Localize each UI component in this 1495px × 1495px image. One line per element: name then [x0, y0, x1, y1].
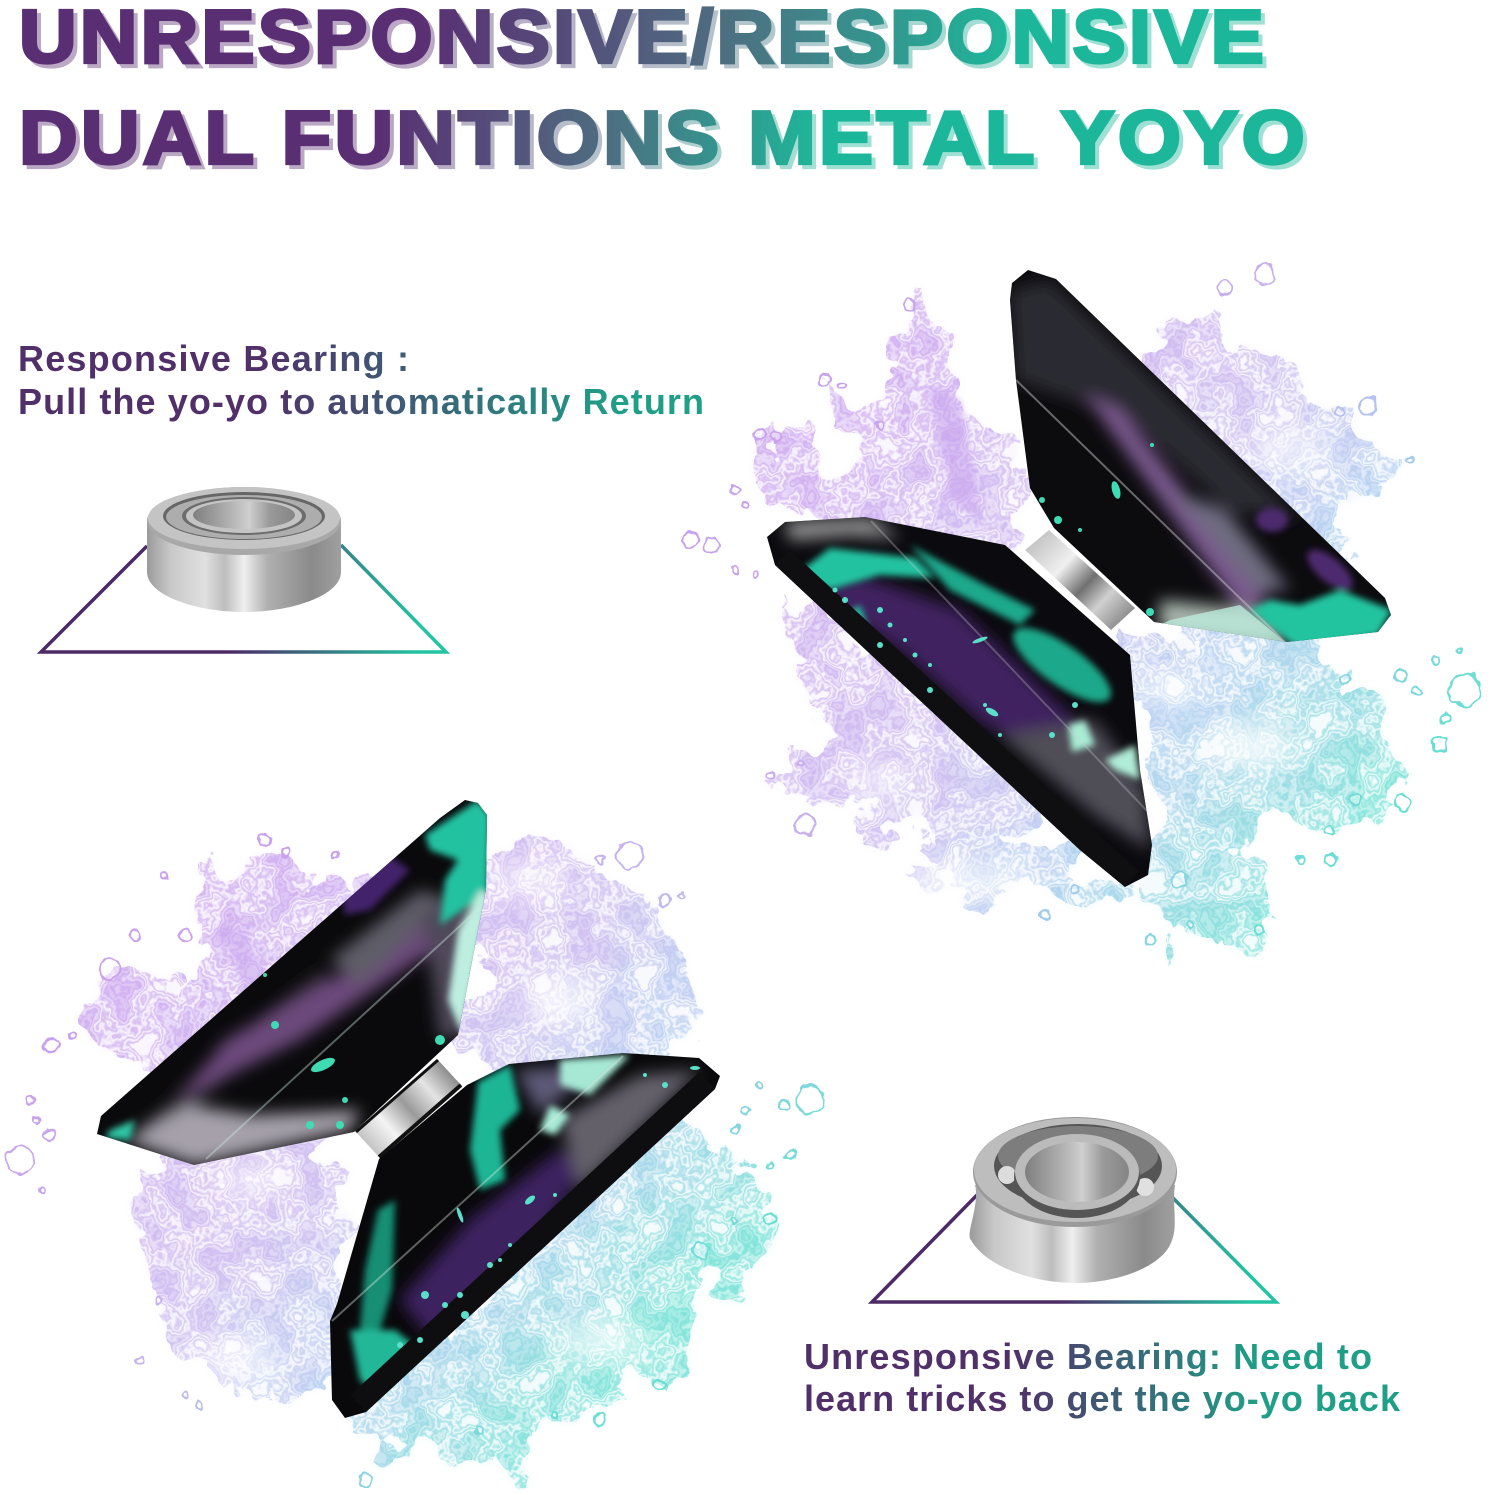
disk: lower left bottom	[325, 1045, 725, 1425]
splash body: upper right	[760, 300, 1420, 950]
splash highlights: upper right	[850, 434, 1330, 896]
text block: responsive bearing: Pull the yo-yo to automatically Return	[18, 381, 704, 422]
disk: upper right front	[760, 510, 1160, 900]
bearing: shielded	[147, 487, 341, 612]
speckles	[263, 973, 445, 1129]
text block: unresponsive bearing	[804, 1336, 1401, 1419]
axle: upper right	[1025, 530, 1135, 630]
title	[19, 0, 1308, 180]
splash body: lower left	[90, 850, 780, 1470]
splash highlights: lower left	[200, 866, 645, 1378]
splash streak: upper right	[925, 385, 985, 525]
speckles	[397, 1066, 700, 1348]
bearing: open with balls	[970, 1117, 1177, 1283]
yoyo: upper right	[760, 260, 1400, 900]
text block: responsive bearing	[18, 338, 704, 422]
triangle outline: unresponsive	[872, 1195, 1276, 1302]
text block: unresponsive bearing: Unresponsive Bearing: Need to	[804, 1336, 1372, 1377]
splash: lower left water	[6, 834, 824, 1487]
speckles	[1039, 443, 1154, 616]
text block: unresponsive bearing: learn tricks to get the yo-yo back	[804, 1378, 1401, 1419]
title line 2: DUAL FUNTIONS METAL YOYO	[19, 96, 1308, 180]
splash: upper right water	[682, 264, 1481, 950]
text block: responsive bearing: Responsive Bearing :	[18, 338, 409, 379]
splash droplets: upper right	[682, 264, 1481, 945]
icon: responsive bearing with triangle	[41, 487, 446, 652]
axle: lower left	[356, 1060, 461, 1157]
speckles	[832, 588, 1078, 738]
icon: unresponsive bearing with triangle	[872, 1117, 1276, 1302]
splash streak: lower left	[215, 925, 275, 1000]
disk: upper right back	[1010, 270, 1391, 642]
splash droplets: lower left	[6, 834, 824, 1487]
yoyo: lower left	[90, 795, 725, 1425]
disk: lower left top	[90, 795, 490, 1170]
triangle outline: responsive	[41, 545, 446, 652]
